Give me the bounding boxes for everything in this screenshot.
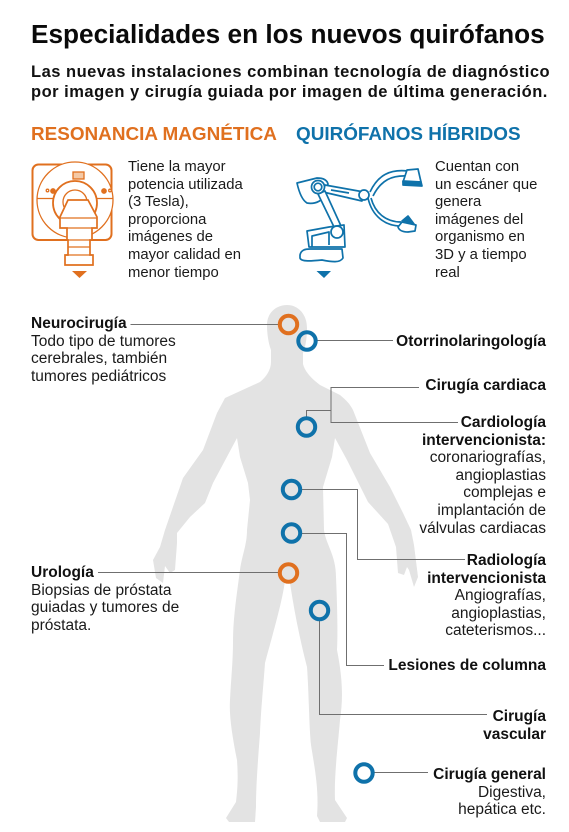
label: Radiología intervencionista: intervencionista bbox=[427, 570, 546, 587]
connector lines bbox=[98, 324, 487, 772]
text: quirófanos description bbox=[435, 159, 537, 281]
label: Cirugía vascular: vascular bbox=[483, 726, 546, 743]
marker: Cirugía cardiaca y cardiología bbox=[298, 418, 315, 436]
label: Cirugía vascular: Cirugía bbox=[493, 708, 546, 725]
label: Cardiología intervencionista: complejas e bbox=[463, 484, 546, 501]
marker: Cirugía general bbox=[355, 764, 373, 782]
label: Cirugía general: Digestiva, bbox=[478, 784, 546, 801]
label: Cardiología intervencionista: Cardiología bbox=[461, 414, 546, 431]
text: quirófanos description: organismo en bbox=[435, 229, 525, 245]
text: resonancia description bbox=[128, 159, 243, 281]
label: Neurocirugía bbox=[31, 315, 176, 385]
marker: Cirugía vascular bbox=[311, 602, 328, 619]
label: Urología: Biopsias de próstata bbox=[31, 582, 171, 599]
marker: Urología bbox=[280, 564, 297, 582]
label: Otorrinolaringología: Otorrinolaringología bbox=[396, 333, 546, 350]
text: resonancia description: (3 Tesla), bbox=[128, 194, 189, 210]
label: Urología: próstata. bbox=[31, 617, 91, 634]
text: quirófanos description: genera bbox=[435, 194, 481, 210]
text: resonancia description: potencia utilizada bbox=[128, 177, 243, 193]
label: Radiología intervencionista: Angiografías, bbox=[455, 587, 546, 604]
heading: resonancia magnética: RESONANCIA MAGNÉTICA bbox=[31, 124, 277, 145]
label: Cardiología intervencionista: intervencionista: bbox=[422, 432, 546, 449]
label: Cirugía vascular bbox=[483, 708, 546, 743]
label: Neurocirugía: cerebrales, también bbox=[31, 350, 167, 367]
label: Cardiología intervencionista: coronariografías, bbox=[430, 449, 546, 466]
subtitle: Las nuevas instalaciones combinan tecnología de diagnóstico bbox=[31, 63, 550, 81]
human body silhouette bbox=[153, 305, 418, 822]
label: Cirugía general bbox=[433, 766, 546, 818]
text: resonancia description: imágenes de bbox=[128, 229, 213, 245]
subtitle bbox=[31, 63, 550, 101]
label: Urología: guiadas y tumores de bbox=[31, 599, 179, 616]
marker: Neurocirugía bbox=[280, 316, 297, 333]
label: Cirugía cardiaca: Cirugía cardiaca bbox=[425, 377, 546, 394]
icon: MRI scanner bbox=[32, 162, 113, 265]
marker: Radiología intervencionista bbox=[283, 481, 300, 498]
text: resonancia description: menor tiempo bbox=[128, 265, 219, 281]
text: resonancia description: mayor calidad en bbox=[128, 247, 241, 263]
label: Radiología intervencionista: Radiología bbox=[467, 552, 546, 569]
label: Radiología intervencionista: angioplastias, bbox=[451, 605, 546, 622]
label: Neurocirugía: tumores pediátricos bbox=[31, 368, 166, 385]
icon: orange arrow bbox=[72, 271, 87, 278]
text: quirófanos description: 3D y a tiempo bbox=[435, 247, 527, 263]
label: Radiología intervencionista bbox=[427, 552, 546, 639]
label: Urología: Urología bbox=[31, 564, 94, 581]
marker: Otorrinolaringología bbox=[298, 332, 316, 350]
text: resonancia description: proporciona bbox=[128, 212, 206, 228]
text: quirófanos description: Cuentan con bbox=[435, 159, 519, 175]
label: Cardiología intervencionista: angioplastias bbox=[456, 467, 546, 484]
subtitle: por imagen y cirugía guiada por imagen de última generación. bbox=[31, 83, 548, 101]
label: Neurocirugía: Neurocirugía bbox=[31, 315, 127, 332]
label: Cardiología intervencionista bbox=[419, 414, 546, 537]
icon: surgical robot arm bbox=[297, 169, 422, 262]
text: quirófanos description: un escáner que bbox=[435, 177, 537, 193]
label: Lesiones de columna: Lesiones de columna bbox=[388, 657, 546, 674]
text: resonancia description: Tiene la mayor bbox=[128, 159, 226, 175]
title: Especialidades en los nuevos quirófanos bbox=[31, 19, 545, 49]
label: Cardiología intervencionista: implantación de bbox=[437, 502, 546, 519]
icon: blue arrow bbox=[316, 271, 331, 278]
label: Urología bbox=[31, 564, 179, 634]
text: quirófanos description: imágenes del bbox=[435, 212, 523, 228]
text: quirófanos description: real bbox=[435, 265, 460, 281]
label: Cardiología intervencionista: válvulas cardiacas bbox=[419, 520, 546, 537]
marker: Lesiones de columna bbox=[283, 524, 300, 542]
label: Neurocirugía: Todo tipo de tumores bbox=[31, 333, 176, 350]
label: Radiología intervencionista: cateterismos... bbox=[445, 622, 546, 639]
label: Cirugía general: Cirugía general bbox=[433, 766, 546, 783]
heading: quirófanos híbridos: QUIRÓFANOS HÍBRIDOS bbox=[296, 124, 521, 145]
label: Cirugía general: hepática etc. bbox=[458, 801, 546, 818]
